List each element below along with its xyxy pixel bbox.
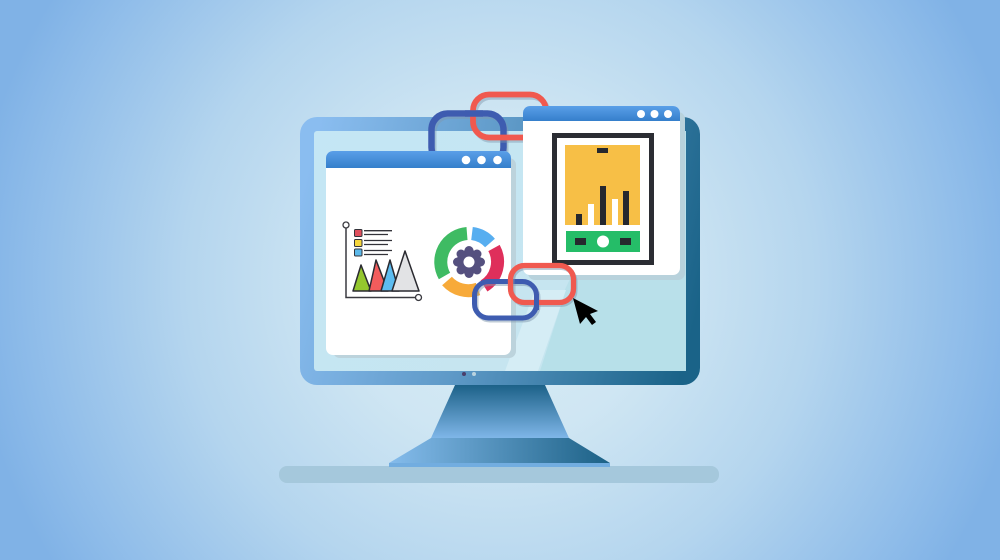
donut gear icon	[441, 234, 498, 291]
chain link: top blue	[432, 114, 506, 166]
window buttons	[637, 110, 672, 118]
chain link: bottom red	[510, 266, 575, 304]
chart bars	[576, 186, 629, 225]
desk shadow bar	[279, 466, 719, 483]
window body	[326, 151, 511, 355]
window buttons	[462, 156, 502, 164]
donut segments	[441, 234, 498, 291]
tablet speaker	[597, 148, 608, 153]
window body	[523, 106, 680, 275]
panel: right window	[523, 106, 685, 280]
stand base lip	[389, 463, 610, 467]
monitor frame	[300, 117, 700, 385]
stand neck	[431, 385, 569, 438]
green control strip	[566, 231, 640, 252]
window shadow	[528, 112, 685, 280]
chain link: top red	[473, 94, 548, 140]
tablet frame	[554, 136, 652, 262]
icon: mouse cursor	[573, 298, 598, 325]
window title bar	[523, 106, 680, 121]
monitor stand	[389, 385, 610, 467]
chart axes	[346, 225, 418, 298]
window title bar	[326, 151, 511, 168]
stand base	[389, 438, 610, 463]
window shadow	[333, 158, 516, 358]
screen dots	[462, 372, 476, 376]
monitor	[300, 117, 700, 385]
triangle peaks	[353, 251, 419, 291]
yellow chart panel	[565, 145, 640, 225]
tablet chart icon	[554, 136, 652, 262]
control buttons	[575, 236, 631, 248]
blue link crossing over red	[465, 110, 483, 117]
gear	[453, 246, 485, 278]
blue link crossing over red	[534, 294, 539, 310]
monitor screen	[314, 131, 686, 371]
panel: left window	[326, 151, 516, 358]
legend	[354, 230, 392, 256]
chain link: bottom blue	[474, 282, 538, 320]
screen highlight	[540, 290, 686, 371]
area chart icon	[343, 222, 422, 300]
